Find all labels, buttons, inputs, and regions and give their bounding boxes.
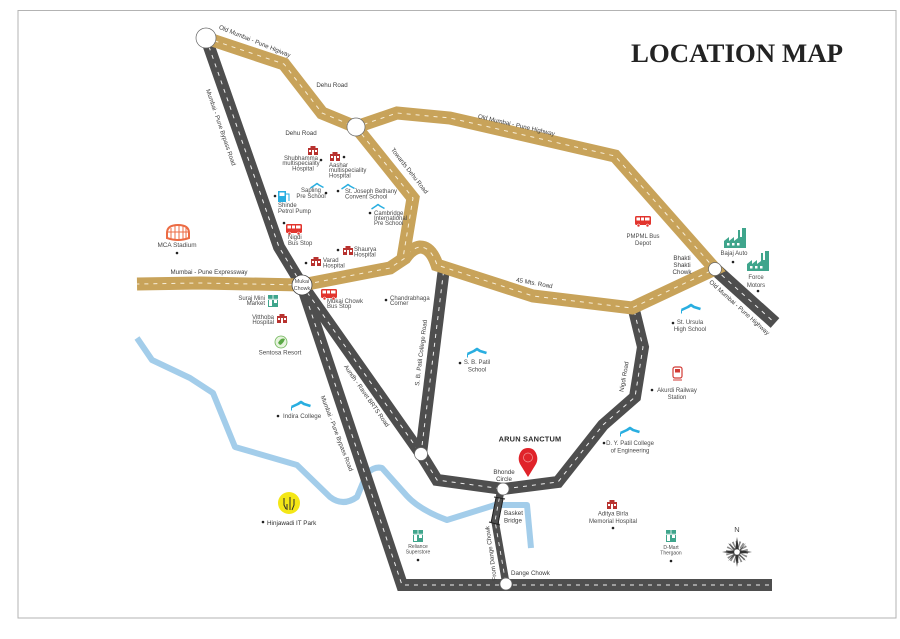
road labels: Bhakti bbox=[673, 255, 691, 262]
poi: D.Y. Patil College: of Engineering bbox=[611, 448, 649, 454]
property label: ARUN SANCTUM bbox=[499, 434, 561, 444]
poi: Bajaj Auto: Bajaj Auto bbox=[720, 251, 748, 257]
poi: Akurdi Railway Station: Station bbox=[668, 395, 686, 401]
dark roads bbox=[206, 38, 775, 585]
road labels: Dehu Road bbox=[316, 82, 348, 89]
icon: north compass: N bbox=[734, 525, 740, 534]
poi: Shaurya Hospital: Hospital bbox=[354, 252, 376, 258]
poi: St Joseph Bethany: Convent School bbox=[345, 194, 387, 200]
poi: Aashar hospital: multispeciality bbox=[329, 168, 366, 174]
poi: Sentosa Resort bbox=[259, 336, 302, 356]
poi: Akurdi Railway Station bbox=[651, 367, 697, 401]
icon: north compass bbox=[722, 525, 752, 567]
poi: Sapling Pre School: Sapling bbox=[301, 188, 321, 194]
poi: Nigdi Bus Stop: Bus Stop bbox=[288, 241, 313, 247]
poi: Mukai Chowk Bus Stop: Bus Stop bbox=[327, 304, 352, 310]
road labels: Towards Dehu Road bbox=[389, 147, 430, 196]
poi: Force Motors bbox=[747, 251, 769, 292]
poi: Sapling Pre School: Pre School bbox=[296, 194, 326, 200]
poi: Reliance Superstore: Reliance bbox=[408, 544, 428, 550]
poi: Aditya Birla Memorial Hospital: Memorial Hospital bbox=[589, 519, 637, 525]
poi: Suraj Mini Market: Market bbox=[247, 301, 265, 307]
poi: St Joseph Bethany bbox=[337, 184, 397, 200]
poi: D.Y. Patil College bbox=[603, 428, 655, 454]
Mukai Chowk junction: Chowk bbox=[294, 286, 311, 292]
poi: MCA Stadium: MCA Stadium bbox=[157, 242, 197, 249]
road labels: Circle bbox=[496, 476, 512, 483]
road labels: Bhonde bbox=[493, 469, 515, 476]
poi: Suraj Mini Market bbox=[238, 295, 278, 307]
road labels: Mumbai - Pune Bypass Road bbox=[319, 395, 354, 473]
poi: St Ursula High School: St. Ursula bbox=[677, 320, 704, 326]
poi: Shubhamma hospital: Shubhamma bbox=[284, 156, 319, 162]
poi: Mukai Chowk Bus Stop bbox=[321, 289, 364, 310]
poi: Cambridge school: Pre School bbox=[374, 221, 403, 227]
poi: Shinde Petrol Pump: Petrol Pump bbox=[278, 209, 312, 215]
poi: Shaurya Hospital: Shaurya bbox=[354, 247, 377, 253]
road labels: Nigdi Road bbox=[618, 361, 631, 392]
poi: Aashar hospital bbox=[329, 152, 366, 180]
road labels: Chowk bbox=[673, 269, 692, 276]
road labels: Dehu Road bbox=[285, 130, 317, 137]
poi: Vitthoba Hospital: Hospital bbox=[252, 320, 274, 326]
poi: Chandrabhaga Corner bbox=[385, 296, 430, 307]
poi: Nigdi Bus Stop: Nigdi bbox=[288, 235, 302, 241]
poi: Mukai Chowk Bus Stop: Mukai Chowk bbox=[327, 299, 364, 305]
poi: Varad Hospital: Hospital bbox=[323, 264, 345, 270]
poi: Force Motors: Force bbox=[748, 275, 764, 281]
poi: Hinjawadi IT Park bbox=[262, 492, 317, 527]
poi: Suraj Mini Market: Suraj Mini bbox=[238, 296, 265, 302]
poi: Vitthoba Hospital: Vitthoba bbox=[252, 315, 275, 321]
poi: S.B. Patil School: School bbox=[468, 368, 486, 374]
poi: Chandrabhaga Corner: Chandrabhaga bbox=[390, 296, 430, 302]
gold roads bbox=[137, 38, 715, 308]
poi: PMPML Bus Depot: PMPML Bus bbox=[626, 234, 660, 240]
poi: Cambridge school bbox=[369, 204, 407, 227]
title: LOCATION MAP bbox=[631, 39, 843, 68]
poi: D.Y. Patil College: D. Y. Patil College bbox=[606, 441, 655, 447]
poi: PMPML Bus Depot bbox=[626, 216, 660, 247]
poi: Sapling Pre School bbox=[296, 184, 327, 200]
road labels: Old Mumbai - Pune Higiway bbox=[218, 24, 292, 60]
poi: Varad Hospital: Varad bbox=[323, 258, 339, 264]
road labels: Old Mumbai - Pune Highway bbox=[707, 279, 771, 337]
poi: Reliance Superstore: Superstore bbox=[406, 550, 430, 556]
poi: St Ursula High School bbox=[672, 305, 706, 333]
junction circles bbox=[196, 28, 722, 590]
poi: Shubhamma hospital bbox=[282, 146, 322, 172]
poi: St Ursula High School: High School bbox=[674, 327, 706, 333]
poi: D-Mart Thergaon: D-Mart bbox=[663, 545, 679, 551]
river bbox=[137, 338, 531, 548]
road labels: Mumbai - Pune Expressway bbox=[170, 269, 248, 276]
road labels bbox=[170, 24, 771, 581]
road labels: Old Mumbai - Pune Highway bbox=[477, 113, 556, 138]
road labels: From Dange Chowk bbox=[484, 525, 499, 581]
poi: Sentosa Resort: Sentosa Resort bbox=[259, 350, 302, 356]
road labels: 45 Mts. Road bbox=[516, 277, 554, 290]
poi: Shubhamma hospital: multispeciality bbox=[282, 161, 320, 167]
poi: Cambridge school: Cambridge bbox=[374, 211, 404, 217]
poi: Shaurya Hospital bbox=[337, 246, 377, 258]
road labels: Basket bbox=[504, 510, 523, 517]
poi: D-Mart Thergaon: Thergaon bbox=[660, 550, 682, 556]
poi: Bajaj Auto bbox=[720, 228, 748, 263]
poi: Aashar hospital: Aashar bbox=[329, 163, 348, 169]
poi: Indira College bbox=[277, 402, 322, 420]
poi: Shinde Petrol Pump bbox=[274, 191, 312, 215]
icon: location pin bbox=[519, 448, 537, 477]
road labels: S. B. Patil College Road bbox=[414, 319, 429, 386]
poi: Vitthoba Hospital bbox=[252, 314, 287, 326]
poi: Indira College: Indira College bbox=[283, 413, 322, 420]
Mukai Chowk junction bbox=[292, 275, 312, 295]
poi: D-Mart Thergaon bbox=[660, 530, 682, 562]
poi: Aashar hospital: Hospital bbox=[329, 174, 351, 180]
poi: Cambridge school: International bbox=[374, 216, 407, 222]
road labels: Bridge bbox=[504, 518, 522, 524]
basket bridge bbox=[489, 497, 505, 525]
poi: Reliance Superstore bbox=[406, 530, 430, 561]
poi: Nigdi Bus Stop bbox=[283, 222, 313, 247]
poi: MCA Stadium bbox=[157, 225, 197, 254]
poi: S.B. Patil School: S. B. Patil bbox=[464, 360, 490, 366]
poi: Aditya Birla Memorial Hospital: Aditya Birla bbox=[598, 512, 629, 518]
poi: PMPML Bus Depot: Depot bbox=[635, 241, 651, 247]
poi: Akurdi Railway Station: Akurdi Railway bbox=[657, 388, 697, 394]
road labels: Aundh - Ravet BRTS Road bbox=[342, 364, 391, 429]
road labels: Dange Chowk bbox=[511, 570, 551, 577]
poi: Varad Hospital bbox=[305, 257, 345, 270]
poi: Force Motors: Motors bbox=[747, 283, 765, 289]
poi: St Joseph Bethany: St. Joseph Bethany bbox=[345, 189, 397, 195]
poi: S.B. Patil School bbox=[459, 349, 490, 374]
poi: Hinjawadi IT Park: Hinjawadi IT Park bbox=[267, 520, 317, 527]
Mukai Chowk junction: Mukai bbox=[295, 279, 309, 285]
poi: Chandrabhaga Corner: Corner bbox=[390, 301, 408, 307]
poi: Aditya Birla Memorial Hospital bbox=[589, 500, 637, 529]
road labels: Shakti bbox=[673, 262, 691, 269]
poi: Shinde Petrol Pump: Shinde bbox=[278, 203, 297, 209]
poi: Shubhamma hospital: Hospital bbox=[292, 166, 314, 172]
road labels: Mumbai - Pune Bypass Road bbox=[204, 88, 237, 167]
